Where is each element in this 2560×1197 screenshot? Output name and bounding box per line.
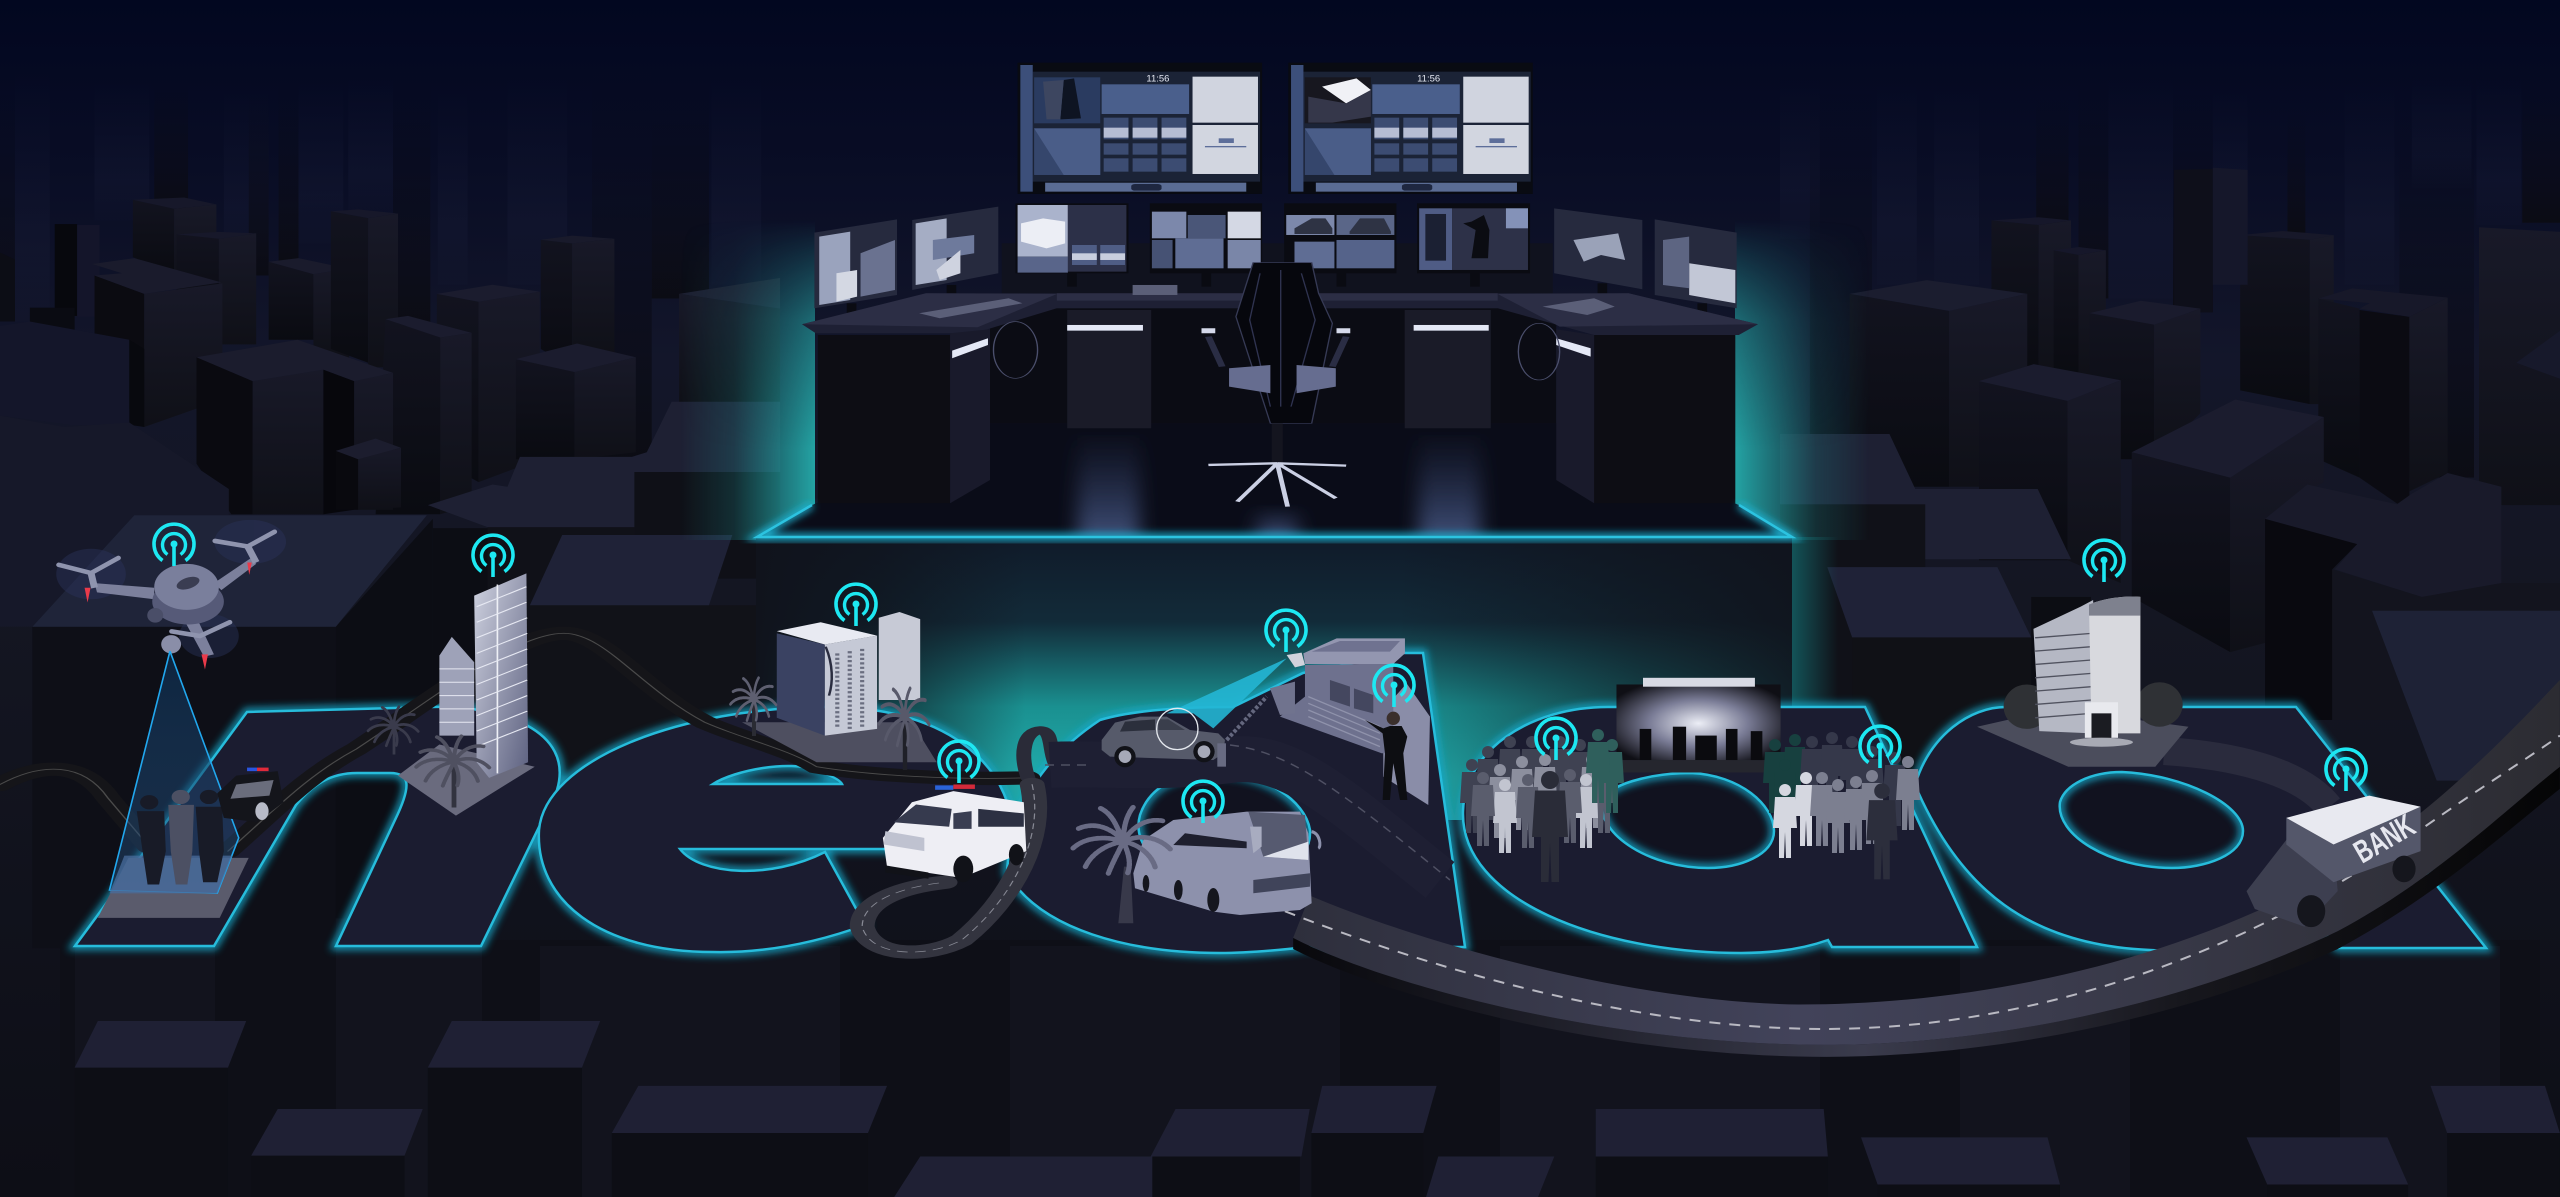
scene: viewing cone, car <box>1102 658 1287 767</box>
scene: pavement and police under drone camera <box>98 651 249 918</box>
panel: control room <box>757 63 1792 538</box>
letterforms: neon glow <box>75 653 2486 953</box>
icon: signal hospital <box>836 584 876 626</box>
wall monitor right: 11:56 <box>1417 73 1440 84</box>
letter n <box>75 707 560 946</box>
scene: ambulance <box>883 784 1026 882</box>
icon: signal bank truck <box>2326 749 2366 791</box>
scene: drone <box>56 520 286 670</box>
desk pedestals <box>1067 310 1491 428</box>
scene: hospital building <box>742 612 937 762</box>
scene: crowd right of stage <box>1763 732 1920 879</box>
wall monitor right <box>1288 63 1533 194</box>
background: lower city columns <box>60 940 2560 1197</box>
background: right skyline buildings <box>1780 78 2560 781</box>
scene: bus with palm <box>1072 806 1320 923</box>
icon: signal ambulance <box>939 741 979 783</box>
scene: twin towers <box>398 573 535 816</box>
label: BANK on truck: BANK <box>2348 807 2421 870</box>
panel: platform front wall with teal gradient <box>756 537 1838 820</box>
letter o final <box>1915 707 2486 951</box>
icon: signal towers <box>473 535 513 577</box>
desk right cabinet <box>1518 323 1735 503</box>
wall monitor left: 11:56 <box>1146 73 1169 84</box>
background: left skyline buildings <box>0 55 780 948</box>
scene: bank armoured truck <box>2247 796 2421 927</box>
scene: palms near towers <box>368 706 489 808</box>
scene: stage <box>1616 678 1781 772</box>
icon: signal guard <box>1374 665 1414 707</box>
control room floor <box>757 423 1792 538</box>
wall monitor left <box>1018 63 1262 194</box>
scene: hospital palms <box>730 677 929 770</box>
letter counters: dark openings <box>713 766 2243 880</box>
scene: security gate <box>1217 638 1430 805</box>
side monitors <box>814 207 1737 317</box>
teal glow behind the control room <box>680 220 1870 540</box>
scene: office building <box>1977 597 2188 767</box>
ramp road to gate <box>1045 745 1450 880</box>
letter e <box>539 707 1013 952</box>
scene: police car <box>217 768 284 822</box>
scene: crowd left of stage <box>1460 729 1624 882</box>
icon: signal bus <box>1183 781 1223 823</box>
platform neon edge <box>757 505 1792 537</box>
scene: security guard <box>1365 712 1407 800</box>
icon: signal crowd left <box>1536 718 1576 760</box>
operator chair <box>1201 263 1350 507</box>
desk left cabinet <box>818 322 1038 503</box>
letter a <box>1463 707 1977 953</box>
icon: signal camera <box>1266 610 1306 652</box>
desk top <box>802 285 1758 335</box>
control room back wall <box>1002 243 1553 310</box>
icon: signal crowd right <box>1860 726 1900 768</box>
desk monitors row <box>1016 203 1530 273</box>
icon: signal drone <box>154 524 194 566</box>
big road foreground <box>1285 680 2560 1057</box>
service road by office building <box>2164 751 2329 807</box>
thin road through the top of the word <box>0 633 1065 952</box>
letter o with gate ramp <box>1007 653 1465 953</box>
icon: signal office <box>2084 540 2124 582</box>
